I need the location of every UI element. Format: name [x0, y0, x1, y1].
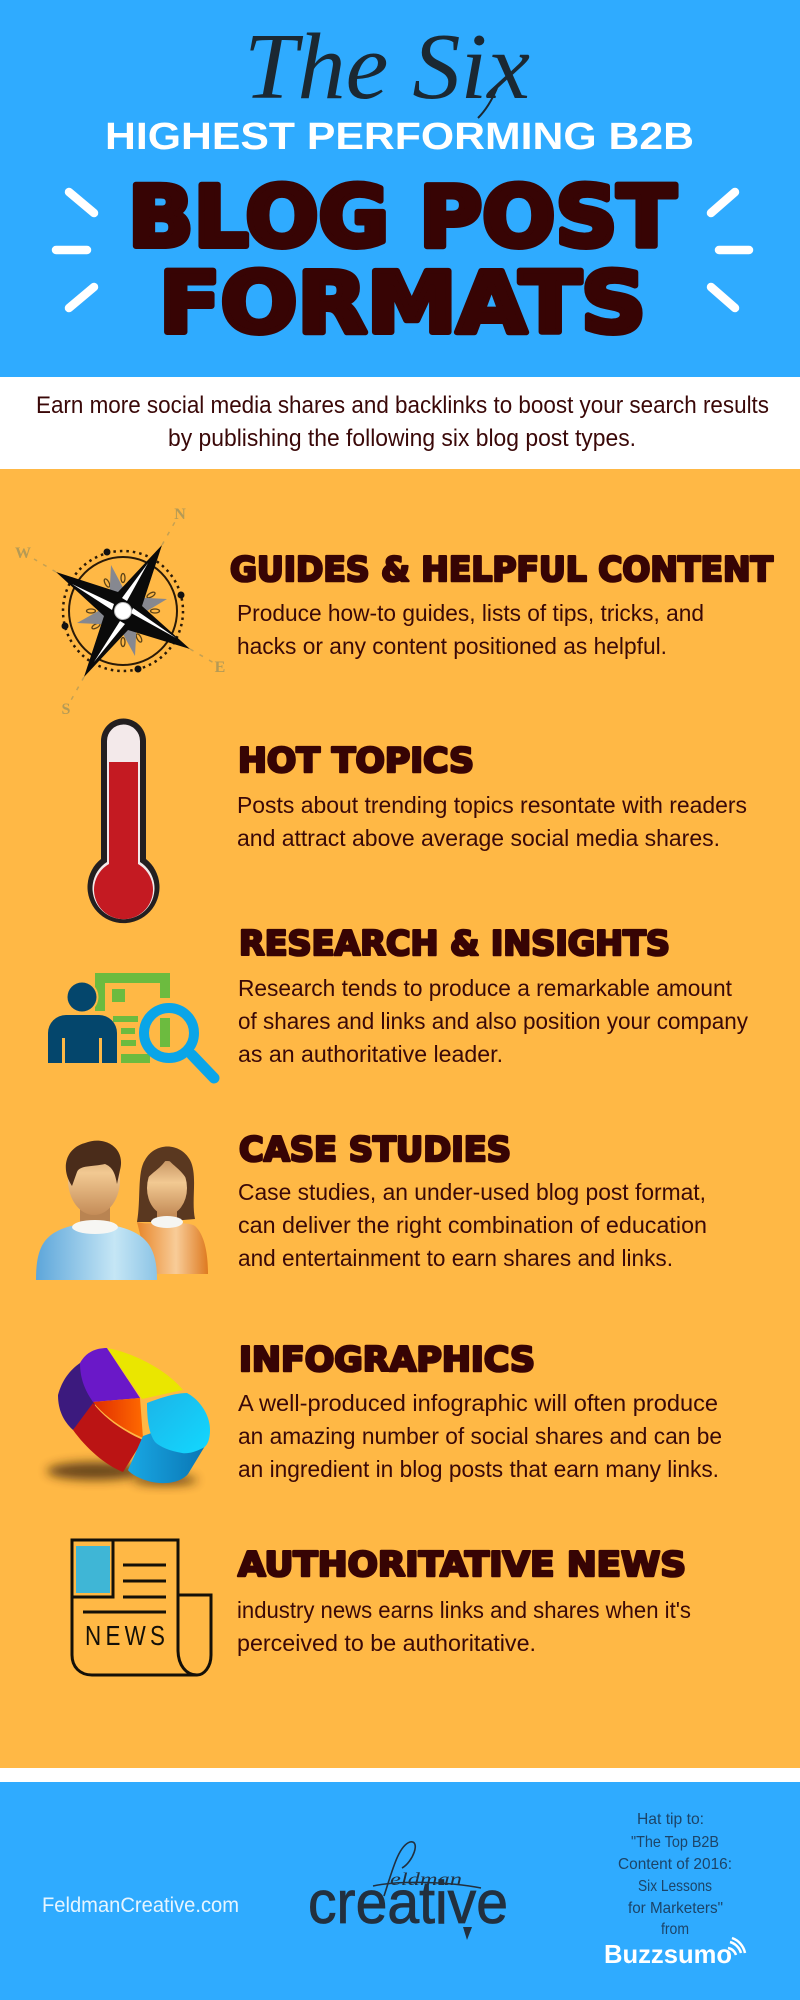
- body text: and entertainment to earn shares and links.: [238, 1245, 673, 1271]
- heading: HOT TOPICS: [238, 741, 474, 781]
- item: hot topics: [88, 718, 747, 923]
- body text: perceived to be authoritative.: [237, 1630, 536, 1656]
- hat tip credit: [618, 1811, 732, 1938]
- intro text: [36, 392, 769, 452]
- body text: of shares and links and also position your company: [238, 1008, 748, 1034]
- logo: Feldman Creative: eldman: [390, 1869, 462, 1889]
- body text: Case studies, an under-used blog post format,: [238, 1179, 706, 1205]
- body text: [237, 792, 747, 851]
- main title line 2: FORMATS: [159, 254, 646, 352]
- icon: thermometer: [88, 718, 160, 923]
- heading: RESEARCH & INSIGHTS: [239, 924, 670, 964]
- subtitle: HIGHEST PERFORMING B2B: [105, 116, 694, 158]
- body text: and attract above average social media shares.: [237, 825, 720, 851]
- title: [56, 15, 749, 352]
- body text: industry news earns links and shares when it's: [237, 1597, 691, 1623]
- item: case studies: [36, 1130, 707, 1280]
- hat tip credit: Six Lessons: [638, 1878, 712, 1895]
- item: authoritative news: [72, 1540, 691, 1675]
- body text: Posts about trending topics resontate with readers: [237, 792, 747, 818]
- hat tip credit: for Marketers": [628, 1900, 723, 1917]
- logo: Feldman Creative: creative: [308, 1869, 508, 1936]
- body text: [237, 1597, 691, 1656]
- hat tip credit: Content of 2016:: [618, 1856, 732, 1873]
- body text: [238, 975, 748, 1067]
- item: infographics: [47, 1340, 722, 1485]
- item: research and insights: [48, 924, 748, 1078]
- logo: Feldman Creative: [308, 1842, 508, 1940]
- icon: two people: [36, 1141, 208, 1280]
- hat tip credit: from: [661, 1921, 689, 1938]
- script heading: The Six: [244, 15, 530, 119]
- icon: compass: E: [215, 659, 225, 676]
- panel: formats background: [0, 469, 800, 1768]
- man: [36, 1141, 157, 1280]
- main title line 1: BLOG POST: [128, 168, 676, 266]
- body text: Research tends to produce a remarkable amount: [238, 975, 733, 1001]
- hat tip credit: "The Top B2B: [631, 1834, 719, 1851]
- panel: header background: [0, 0, 800, 377]
- hat tip credit: Hat tip to:: [637, 1811, 704, 1828]
- icon: research person and magnifier: [48, 973, 214, 1078]
- body text: hacks or any content positioned as helpful.: [237, 633, 667, 659]
- website link: FeldmanCreative.com: [42, 1894, 239, 1917]
- icon: newspaper: [72, 1540, 211, 1675]
- heading: AUTHORITATIVE NEWS: [238, 1545, 686, 1585]
- body text: Produce how-to guides, lists of tips, tricks, and: [237, 600, 704, 626]
- body text: [238, 1390, 722, 1482]
- icon: compass: W: [15, 545, 31, 562]
- icon: left rays: [56, 192, 94, 308]
- logo: Buzzsumo: Buzzsumo: [604, 1939, 732, 1969]
- icon: 3D pie chart: [47, 1348, 210, 1485]
- body text: can deliver the right combination of education: [238, 1212, 707, 1238]
- body text: [238, 1179, 707, 1271]
- icon: newspaper: NEWS: [85, 1621, 165, 1652]
- icon: compass: N: [174, 506, 186, 523]
- heading: GUIDES & HELPFUL CONTENT: [230, 550, 774, 590]
- woman: [137, 1146, 208, 1274]
- intro text: Earn more social media shares and backlinks to boost your search results: [36, 392, 769, 419]
- heading: INFOGRAPHICS: [239, 1340, 535, 1380]
- icon: right rays: [711, 192, 749, 308]
- body text: an ingredient in blog posts that earn many links.: [238, 1456, 719, 1482]
- icon: compass: S: [62, 701, 71, 718]
- item: guides and helpful content: [15, 506, 774, 718]
- icon: compass: [15, 506, 225, 718]
- panel: intro band: [0, 377, 800, 469]
- panel: footer background: [0, 1782, 800, 2000]
- body text: an amazing number of social shares and can be: [238, 1423, 722, 1449]
- body text: as an authoritative leader.: [238, 1041, 503, 1067]
- body text: A well-produced infographic will often produce: [238, 1390, 718, 1416]
- heading: CASE STUDIES: [239, 1130, 511, 1170]
- intro text: by publishing the following six blog post types.: [168, 425, 636, 452]
- body text: [237, 600, 704, 659]
